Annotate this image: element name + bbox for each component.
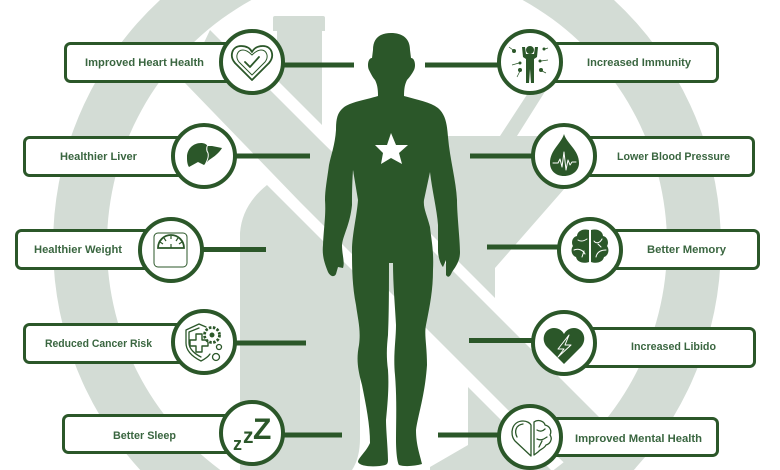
label: Increased Libido: Increased Libido — [631, 341, 716, 353]
label: Increased Immunity: Increased Immunity — [587, 57, 692, 69]
icon: sleeping Z letters: z — [243, 425, 254, 448]
icon: liver — [187, 143, 222, 167]
label: Improved Mental Health: Improved Mental Health — [575, 433, 702, 445]
icon: sleeping Z letters: z — [233, 434, 242, 454]
label: Lower Blood Pressure: Lower Blood Pressure — [617, 151, 730, 163]
icon: weight scale — [154, 233, 187, 267]
white star on chest — [375, 133, 408, 164]
item: Reduced Cancer Risk — [24, 311, 306, 373]
item: Improved Mental Health — [438, 406, 718, 468]
label: Reduced Cancer Risk: Reduced Cancer Risk — [45, 338, 153, 350]
icon: blood drop with pulse — [550, 134, 579, 176]
label: Better Sleep: Better Sleep — [113, 430, 176, 442]
item: Increased Libido — [469, 312, 754, 374]
icon: shield and gears — [186, 324, 222, 361]
item: Improved Heart Health — [66, 31, 354, 93]
item: Lower Blood Pressure — [470, 125, 754, 187]
icon: heart with check — [232, 46, 272, 80]
human body silhouette — [323, 33, 460, 466]
label: Improved Heart Health: Improved Heart Health — [85, 57, 204, 69]
label: Healthier Weight: Healthier Weight — [34, 244, 122, 256]
icon: heart with lightning — [544, 328, 584, 364]
label: Better Memory: Better Memory — [647, 244, 727, 256]
icon: sleeping Z letters — [233, 413, 271, 454]
label: Healthier Liver: Healthier Liver — [60, 151, 138, 163]
icon: brain — [572, 229, 608, 263]
item: Better Memory — [487, 219, 758, 281]
item: Healthier Liver — [24, 125, 310, 187]
item: Better Sleep — [64, 402, 342, 464]
item: Healthier Weight — [16, 219, 266, 281]
icon: sleeping Z letters: Z — [253, 413, 271, 446]
icon: half heart half brain — [512, 421, 551, 456]
item: Increased Immunity — [425, 31, 718, 93]
icon: figure with germs — [509, 46, 548, 83]
